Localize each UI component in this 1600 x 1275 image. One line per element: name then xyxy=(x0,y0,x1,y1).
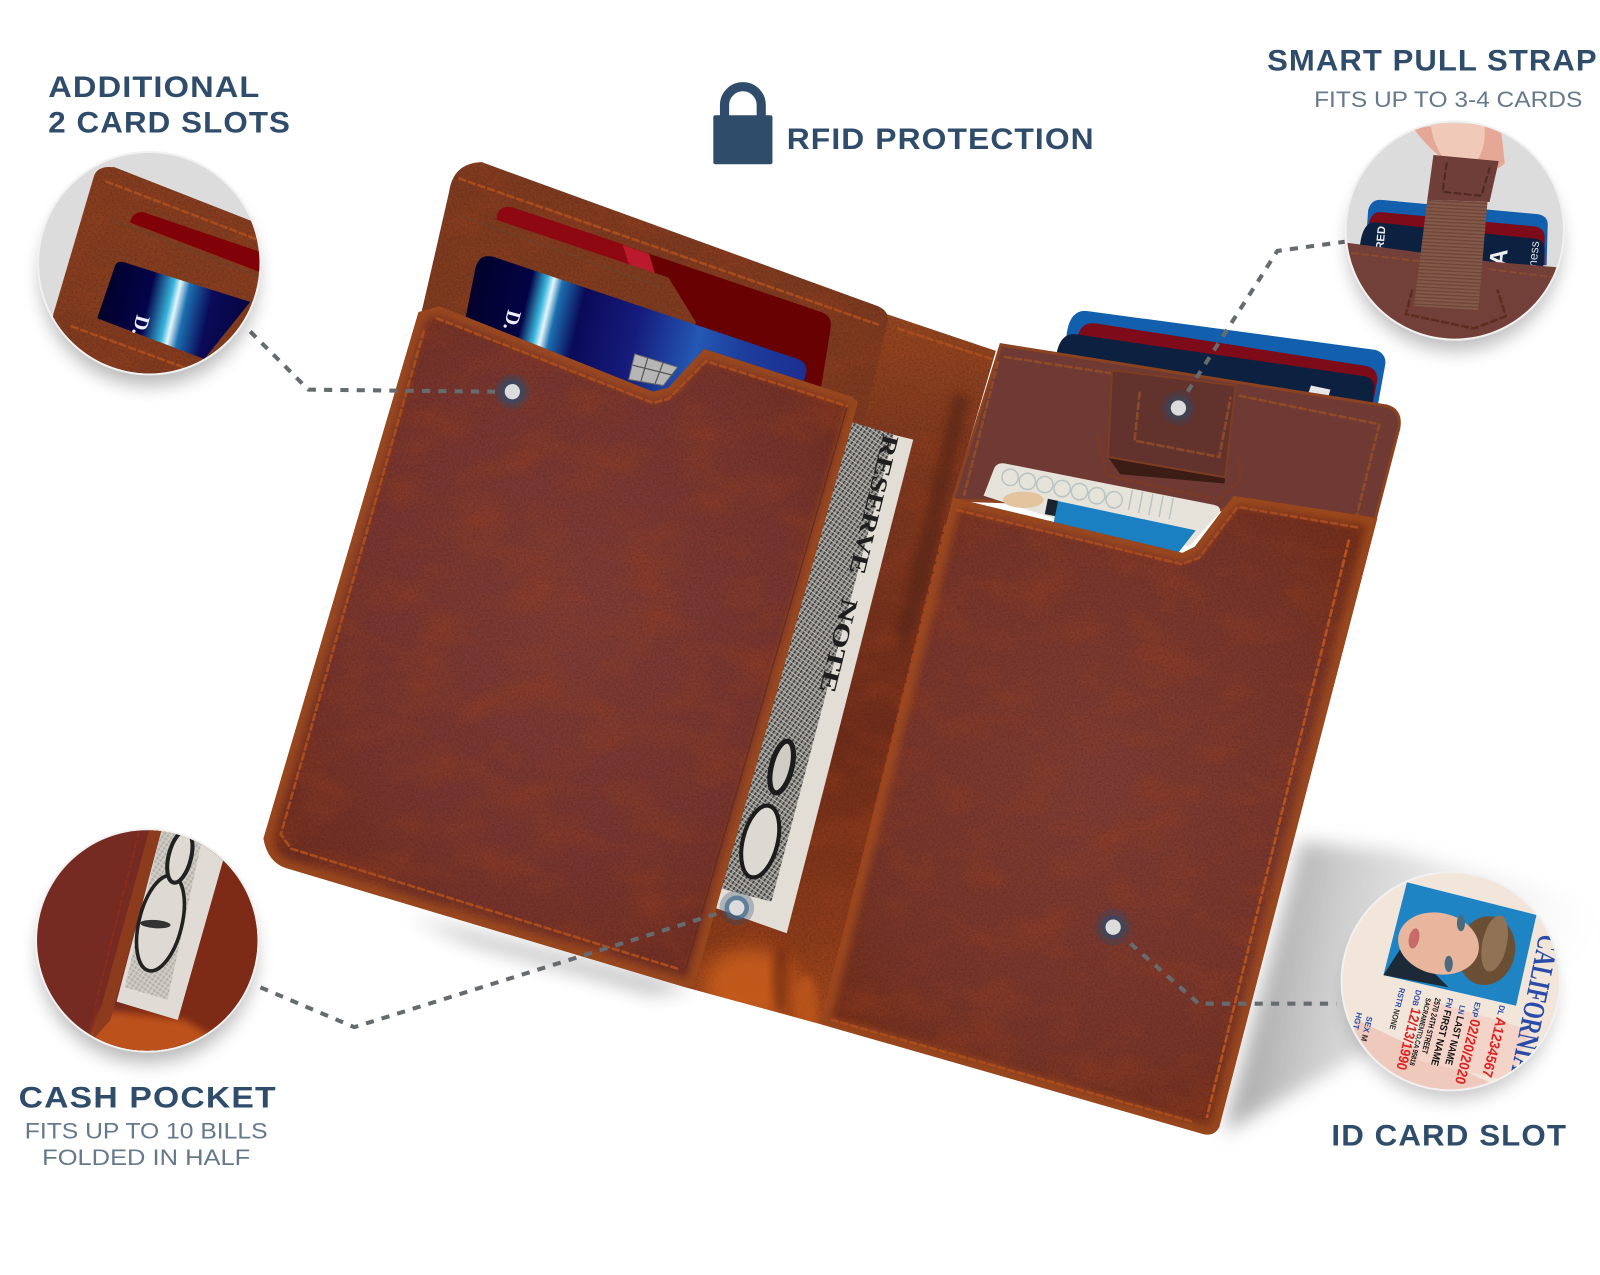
hotspot: id slot xyxy=(1095,909,1132,946)
left pocket stitching xyxy=(281,318,847,969)
ID card in slot xyxy=(984,463,1220,559)
detail circle: smart pull strap: A xyxy=(1485,247,1514,268)
dashed leader: additional card slots xyxy=(250,332,495,392)
heading: 2 card slots line: 2 CARD SLOTS xyxy=(48,107,291,140)
dashed leader: smart pull strap xyxy=(1188,242,1345,392)
right pocket edge tint xyxy=(820,496,1377,1135)
detail circle: cash pocket xyxy=(31,821,266,1063)
left back panel xyxy=(419,162,888,428)
blue card xyxy=(465,256,806,408)
ID card guilloche xyxy=(1002,469,1173,519)
detail circle: id card: DL A1234567 xyxy=(1478,1004,1511,1079)
right upper stitching xyxy=(964,357,1379,515)
right front pocket xyxy=(820,496,1377,1135)
hotspot: card slots xyxy=(495,374,530,409)
ID black mark xyxy=(1045,499,1058,516)
spine xyxy=(686,314,996,1024)
strap tab xyxy=(1108,370,1236,483)
hotspot: pull strap xyxy=(1161,391,1196,425)
ID tan mark xyxy=(1003,492,1044,508)
cash bill xyxy=(709,422,913,933)
detail circle: id card: FN FIRST NAME xyxy=(1428,997,1455,1067)
heading: additional 2 card slots: ADDITIONAL xyxy=(48,71,260,104)
detail circle: id card: RSTR NONE xyxy=(1387,987,1407,1031)
right pocket stitching xyxy=(827,507,1357,1122)
dashed leader: cash pocket xyxy=(260,913,719,1027)
detail circle: id card: EXP 02/20/2020 xyxy=(1451,1001,1487,1086)
wallet cast shadows xyxy=(408,842,1600,1132)
bill oval portrait xyxy=(735,802,786,881)
detail circle: id card: DOB 12/13/1990 xyxy=(1392,988,1428,1072)
hotspot: cash pocket xyxy=(719,890,754,925)
detail circle: id card xyxy=(1337,867,1566,1102)
ID blue band xyxy=(1052,501,1196,559)
detail circle: id card: HGT xyxy=(1351,1011,1364,1030)
middle pocket layer xyxy=(421,194,696,357)
heading: cash pocket: CASH POCKET xyxy=(19,1082,277,1115)
detail circle: smart pull strap: RED xyxy=(1374,226,1388,250)
left front pocket xyxy=(263,306,858,987)
bill numeral xyxy=(765,739,798,795)
card chip xyxy=(629,354,678,386)
heading: rfid protection: RFID PROTECTION xyxy=(787,123,1095,156)
card logo text: D. xyxy=(498,308,525,333)
bill text note: NOTE xyxy=(814,595,862,696)
detail circle: id card: SEX M xyxy=(1359,1015,1374,1042)
wallet xyxy=(263,162,1399,1135)
heading: id card slot: ID CARD SLOT xyxy=(1331,1119,1567,1152)
left pocket edge tint xyxy=(263,306,858,987)
bill text: RESERVE xyxy=(843,432,903,577)
spine shading xyxy=(704,328,992,1046)
detail circle: id card: CALIFORNIA xyxy=(1504,932,1566,1077)
heading: smart pull strap: SMART PULL STRAP xyxy=(1267,44,1598,77)
dashed leader: id card slot xyxy=(1130,944,1337,1004)
detail circle: id card: LN LAST NAME xyxy=(1442,1004,1468,1066)
detail circle: id card: SACRAMENTO,CA 95818 xyxy=(1408,997,1432,1066)
subheading: fits up to 3-4 cards: FITS UP TO 3-4 CARDS xyxy=(1314,87,1582,112)
top stitching of left back panel xyxy=(459,178,878,324)
red card xyxy=(490,207,831,398)
right upper panel xyxy=(953,345,1399,530)
middle pocket stitching xyxy=(461,216,663,288)
detail circle: additional card slots xyxy=(31,143,276,388)
detail circle: id card: 2570 24TH STREET xyxy=(1420,997,1442,1055)
detail circle: smart pull strap: ness xyxy=(1526,240,1542,268)
subheading: fits up to 10 bills: FITS UP TO 10 BILLS xyxy=(25,1118,268,1143)
detail circle: smart pull strap xyxy=(1337,112,1573,352)
detail circle: additional card slots: D. xyxy=(127,313,153,338)
strap slot stitching xyxy=(1098,437,1241,500)
protruding cards behind right panel xyxy=(1055,311,1385,410)
subheading: folded in half: FOLDED IN HALF xyxy=(42,1145,250,1170)
icon: padlock xyxy=(713,87,772,164)
